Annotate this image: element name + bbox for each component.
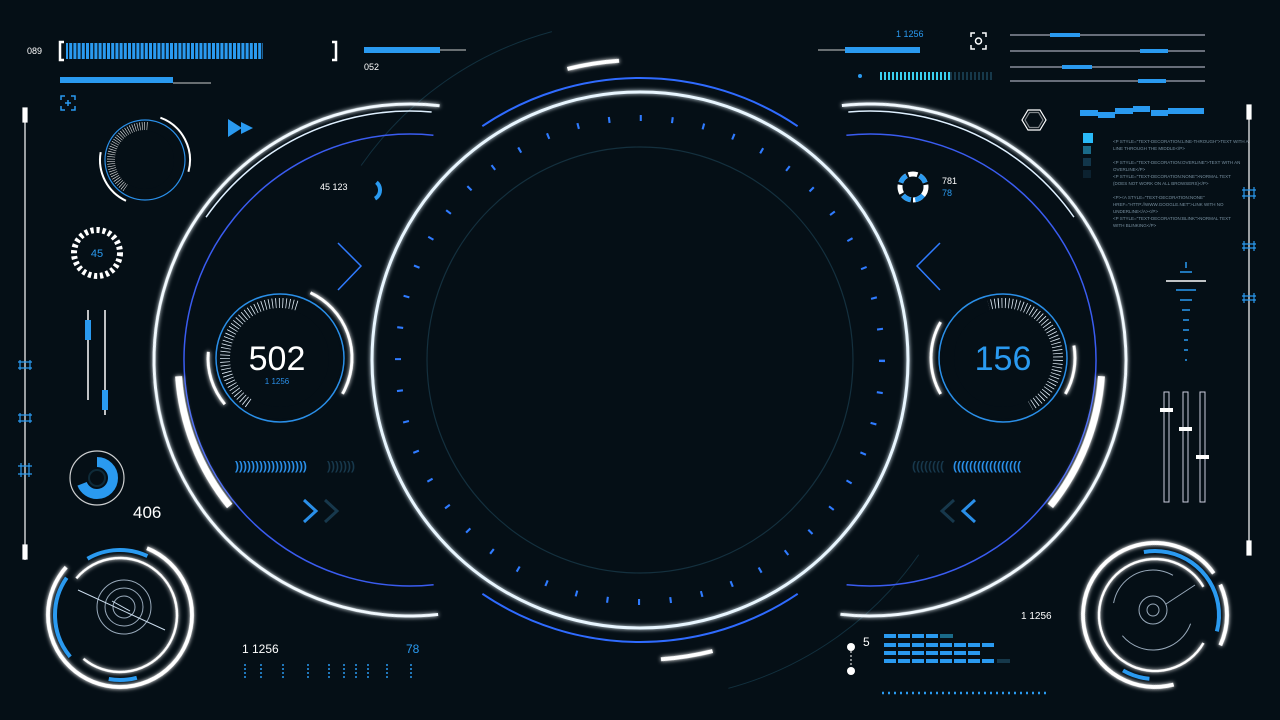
icon: target <box>971 33 986 49</box>
arrow strip left <box>235 459 355 473</box>
left gauge 502: 1 1256 <box>265 377 290 386</box>
left vertical scale <box>18 108 32 560</box>
small readout 45 123: 45 123 <box>320 182 348 192</box>
right gauge 156 <box>905 260 1101 456</box>
right vertical scale <box>1242 105 1256 555</box>
bottom-right radar <box>1059 519 1251 711</box>
icon: focus <box>61 96 75 110</box>
vertical sliders <box>85 310 108 415</box>
left big arc frame <box>63 13 757 707</box>
top-left bracket bar <box>27 42 336 83</box>
donut 406 <box>70 451 161 522</box>
bottom-right readouts: 5 <box>863 635 870 649</box>
bottom-left readout <box>242 642 420 680</box>
bottom-left readout: 78 <box>406 642 420 656</box>
icon: play <box>228 119 253 137</box>
equalizer <box>1166 262 1206 360</box>
step bar <box>1080 106 1204 118</box>
code text block: <P><A STYLE="TEXT-DECORATION:NONE" <box>1113 195 1205 200</box>
top bar 1 1256: 1 1256 <box>896 29 924 39</box>
icon: hexagon <box>1022 110 1046 130</box>
dial ticks <box>398 118 882 602</box>
right big arc frame <box>587 77 1153 643</box>
code text block: <P STYLE="TEXT-DECORATION:OVERLINE">TEXT WITH AN <box>1113 160 1240 165</box>
arrow strip right: ((((((((((((((((( <box>953 459 1021 473</box>
bottom-right readouts <box>847 611 1052 693</box>
code text block: WITH BLINKING</P> <box>1113 223 1157 228</box>
right sliders <box>1160 392 1209 502</box>
arrow strip right: (((((((( <box>912 459 944 473</box>
code text block: HREF="HTTP://WWW.GOOGLE.NET">LINK WITH NO <box>1113 202 1224 207</box>
spinner: 45 <box>91 248 103 260</box>
top bar 1 1256 <box>818 29 992 78</box>
top bar 052: 052 <box>364 62 379 72</box>
arrow strip right <box>912 459 1021 473</box>
code text block: <P STYLE="TEXT-DECORATION:NONE">NORMAL TEXT <box>1113 174 1231 179</box>
top-left bracket bar: 089 <box>27 46 42 56</box>
code text block <box>1083 133 1249 228</box>
central dial <box>166 0 1114 720</box>
code text block: <P STYLE="TEXT-DECORATION:BLINK">NORMAL TEXT <box>1113 216 1231 221</box>
code text block: UNDERLINE</A></P> <box>1113 209 1158 214</box>
donut 781 <box>898 172 957 202</box>
donut 781: 78 <box>942 188 952 198</box>
code text block: <P STYLE="TEXT-DECORATION:LINE-THROUGH">TEXT WITH A <box>1113 139 1249 144</box>
top bar 052 <box>364 47 466 72</box>
bottom-left radar <box>26 521 214 709</box>
donut 781: 781 <box>942 176 957 186</box>
arrow strip left: )))))))))))))))))) <box>235 459 307 473</box>
chevron lines <box>338 243 940 290</box>
bottom-right readouts: 1 1256 <box>1021 611 1052 622</box>
code text block: (DOES NOT WORK ON ALL BROWSERS)</P> <box>1113 181 1209 186</box>
right gauge 156: 156 <box>975 340 1031 378</box>
double chevrons <box>304 500 975 522</box>
code text block: LINE THROUGH THE MIDDLE</P> <box>1113 146 1185 151</box>
small readout 45 123 <box>320 176 384 204</box>
left gauge 502: 502 <box>249 340 305 378</box>
left gauge 502 <box>179 257 381 459</box>
bottom-left readout: 1 1256 <box>242 642 279 656</box>
donut 406: 406 <box>133 503 161 522</box>
left circle gauge <box>85 100 205 220</box>
right lines <box>1010 33 1205 83</box>
spinner <box>74 230 120 276</box>
code text block: OVERLINE</P> <box>1113 167 1146 172</box>
arrow strip left: ))))))) <box>327 459 355 473</box>
